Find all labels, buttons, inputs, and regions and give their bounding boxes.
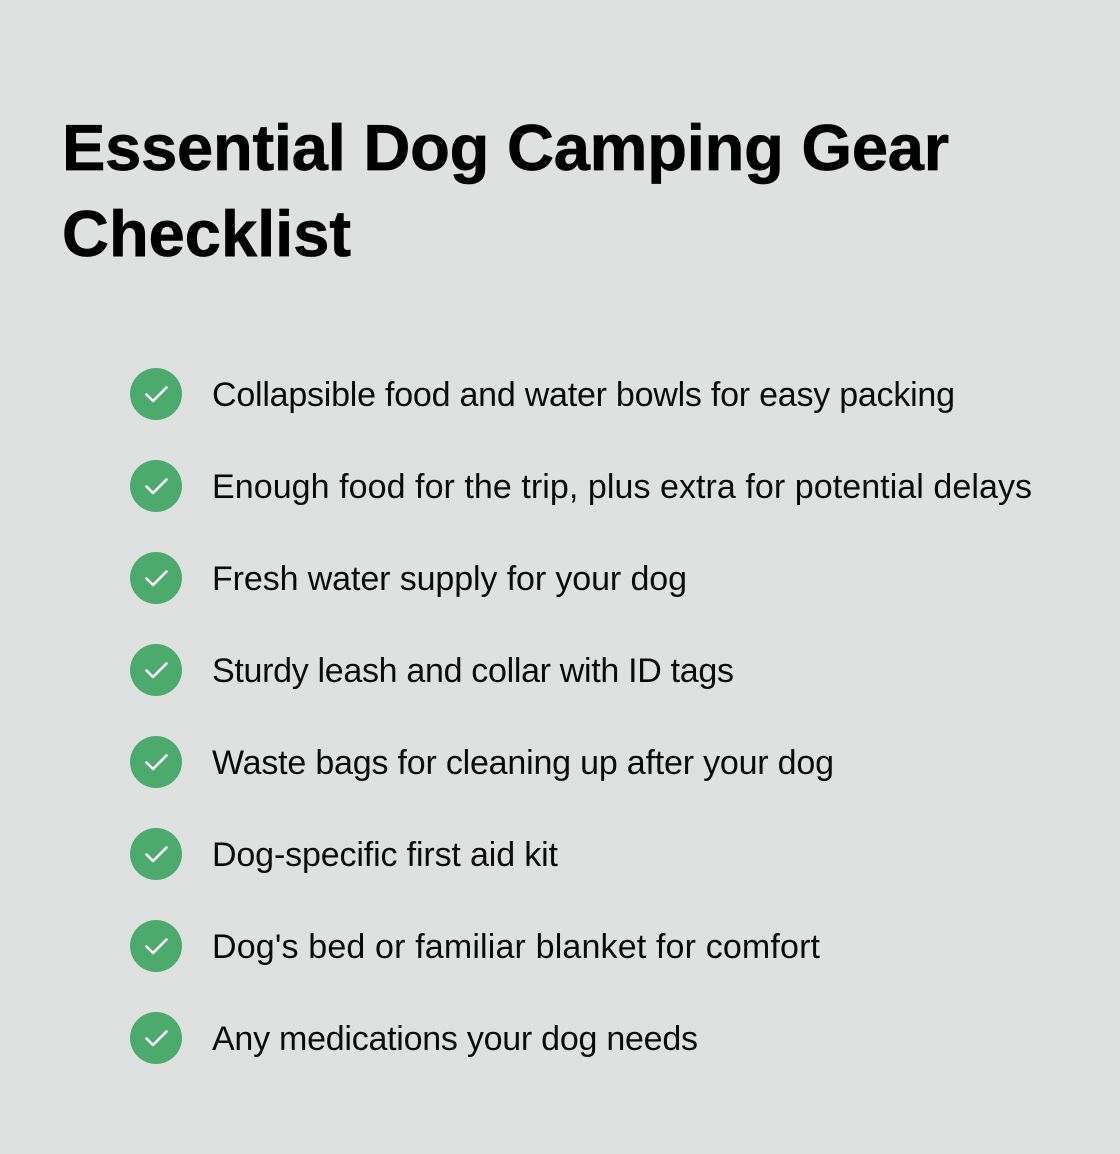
item: collapsible bowls: Collapsible food and water bowls for easy packing [212, 376, 955, 414]
item: bed or blanket [130, 920, 821, 972]
item: waste bags: Waste bags for cleaning up after your dog [212, 744, 834, 782]
item: leash and collar [130, 644, 734, 696]
checklist [130, 368, 1032, 1064]
item: first aid kit: Dog-specific first aid kit [212, 836, 559, 874]
item: first aid kit [130, 828, 559, 880]
item: medications [130, 1012, 698, 1064]
item: collapsible bowls [130, 368, 955, 420]
item: waste bags [130, 736, 834, 788]
item: fresh water [130, 552, 687, 604]
title: Checklist [62, 197, 351, 270]
title: Essential Dog Camping Gear [62, 111, 949, 184]
item: enough food [130, 460, 1032, 512]
title [62, 111, 949, 270]
item: medications: Any medications your dog needs [212, 1020, 698, 1058]
item: leash and collar: Sturdy leash and collar with ID tags [212, 652, 734, 690]
item: bed or blanket: Dog's bed or familiar blanket for comfort [212, 928, 821, 966]
item: enough food: Enough food for the trip, plus extra for potential delays [212, 468, 1032, 506]
item: fresh water: Fresh water supply for your dog [212, 560, 687, 598]
